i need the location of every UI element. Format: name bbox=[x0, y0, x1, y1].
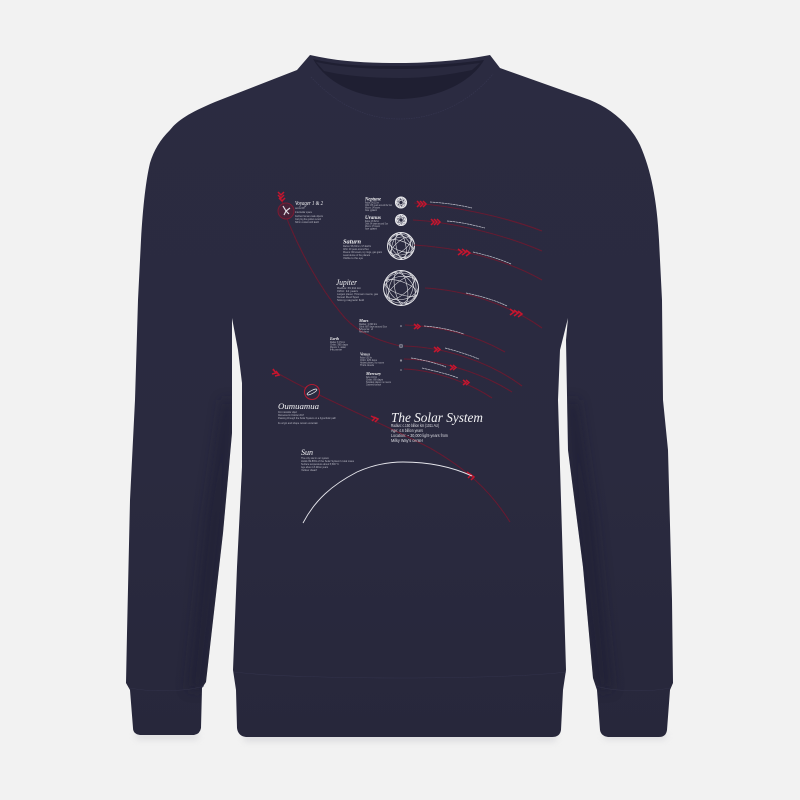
planet: earth: Earth bbox=[329, 336, 339, 341]
planet: jupiter bbox=[336, 267, 421, 309]
planet: mercury: Orbit: 88 days bbox=[366, 378, 383, 382]
orbit: saturn bbox=[414, 245, 542, 280]
planet: saturn: Moons: 82 known, icy rings, gas giant bbox=[343, 250, 382, 254]
planet: saturn: Saturn bbox=[343, 238, 361, 246]
orbit: neptune bbox=[414, 201, 542, 231]
planet: earth: Moons: 1, water bbox=[330, 345, 346, 349]
sweatshirt bbox=[126, 55, 673, 737]
icon: voyager probe bbox=[278, 203, 294, 219]
orbit: mars bbox=[405, 324, 505, 352]
text: sun: Sun bbox=[301, 448, 313, 457]
orbit: venus bbox=[404, 358, 512, 392]
sweatshirt silhouette bbox=[126, 55, 673, 737]
planet: jupiter: Largest planet, 79 known moons, gas bbox=[337, 292, 378, 296]
text: sun: Holds 99.86% of the Solar System's total mass bbox=[301, 459, 354, 463]
planet: uranus bbox=[365, 213, 407, 230]
text: oumuamua: Its origin and shape remain uncertain bbox=[278, 421, 318, 425]
planet: earth: Radius: 6,371 km bbox=[330, 340, 345, 344]
planet: venus: Hottest planet, no moons bbox=[360, 360, 384, 364]
title: The Solar System bbox=[391, 411, 483, 426]
planet: mars: Orbit: 687 days around Sun bbox=[359, 324, 387, 328]
planet: neptune bbox=[364, 196, 407, 212]
sun arc bbox=[303, 462, 472, 523]
back collar band bbox=[316, 62, 480, 78]
planet: neptune: Orbit: 165 years around the Sun bbox=[365, 203, 392, 207]
planet: saturn: Least dense of the planets bbox=[343, 253, 370, 257]
planet: uranus: Radius: 25,362 km bbox=[365, 219, 379, 223]
solar system facts bbox=[391, 423, 448, 443]
text: sun: Age about 4.6 billion years bbox=[301, 465, 328, 469]
planet: saturn: Visible to the eye bbox=[343, 256, 363, 260]
planet: venus bbox=[360, 352, 402, 367]
planet: uranus: Orbit: 84 years around Sun bbox=[365, 222, 388, 226]
hem seam bbox=[234, 672, 566, 678]
orbit: mercury bbox=[404, 368, 492, 398]
planet: saturn: Orbit: 29 years around Sun bbox=[343, 247, 369, 251]
planet: jupiter: Jupiter bbox=[336, 278, 358, 287]
text: sun: Yellow dwarf bbox=[301, 468, 317, 472]
planet: neptune: Ice giant bbox=[365, 208, 377, 212]
planet: mercury: Smallest planet, no moons bbox=[366, 380, 391, 384]
planet: jupiter: Orbit: 12 years bbox=[337, 289, 359, 293]
solar system facts: Location: ~ 30,000 light-years from bbox=[391, 433, 448, 438]
text: voyager: Interstellar space bbox=[295, 210, 312, 214]
planet: neptune: Radius: 24,622 km bbox=[365, 200, 379, 204]
planet: saturn: Radius: 58,232 km, 9.5 Earths bbox=[343, 244, 371, 248]
text: oumuamua bbox=[278, 402, 336, 425]
text: oumuamua: Oumuamua bbox=[278, 402, 319, 411]
planet: jupiter: Great Red Spot bbox=[337, 295, 359, 299]
text: voyager: Carrying the golden record bbox=[295, 217, 321, 221]
text: oumuamua: Discovered in October 2017 bbox=[278, 413, 304, 417]
right cuff seam bbox=[596, 686, 670, 691]
collar seam bbox=[311, 74, 493, 119]
title block bbox=[391, 411, 483, 443]
solar system artwork bbox=[272, 192, 542, 523]
solar system facts: Radius: c.150 billion km (1011 AU) bbox=[391, 423, 439, 428]
planet: neptune: Neptune bbox=[364, 198, 382, 202]
orbit: uranus bbox=[413, 219, 542, 251]
planet: neptune: Moons: 14 known bbox=[365, 206, 380, 210]
planet: venus: Radius: 6,052 km bbox=[360, 356, 372, 360]
text: oumuamua: Passing through the Solar System on a hyperbolic path bbox=[278, 416, 336, 420]
planet: jupiter: Radius: 69,911 km bbox=[337, 286, 361, 290]
text: voyager: Launched 1977 bbox=[295, 206, 305, 210]
left cuff seam bbox=[130, 686, 204, 691]
shadow beneath garment bbox=[136, 733, 666, 741]
planet: earth: Orbit: 365 days bbox=[330, 342, 348, 346]
planet: mars: Red planet bbox=[359, 330, 369, 334]
solar system facts: Age: 4.6 billion years bbox=[391, 428, 424, 433]
planet: venus: Thick clouds bbox=[360, 363, 374, 367]
planet: venus: Venus bbox=[360, 352, 370, 356]
icon: oumuamua bbox=[304, 384, 320, 400]
planet: uranus: Ice giant bbox=[365, 226, 377, 230]
planet: uranus: Uranus bbox=[365, 216, 381, 221]
planet: mercury: Mercury bbox=[365, 371, 382, 376]
orbit: earth bbox=[404, 346, 522, 386]
planet: uranus: Moons: 27 known bbox=[365, 224, 380, 228]
orbit: jupiter bbox=[425, 288, 542, 328]
text: oumuamua: First interstellar object bbox=[278, 410, 297, 414]
planet: mercury: Radius: 2,440 km bbox=[366, 375, 377, 379]
text: voyager: Still in contact with Earth bbox=[295, 220, 319, 224]
text: sun: Surface temperature about 5,500 °C bbox=[301, 462, 340, 466]
neck interior bbox=[313, 59, 484, 99]
text: sun: The only star in our system bbox=[301, 456, 329, 460]
text: sun bbox=[301, 448, 354, 472]
planet: venus: Orbit: 225 days bbox=[360, 358, 377, 362]
voyager trajectory bbox=[278, 192, 400, 346]
planet: mercury: Cratered surface bbox=[366, 382, 381, 386]
planet: earth bbox=[329, 336, 403, 352]
planet: saturn bbox=[343, 230, 417, 262]
planet: mercury bbox=[365, 369, 402, 386]
planet: jupiter: Strong magnetic field bbox=[337, 298, 364, 302]
planet: earth: Home bbox=[330, 348, 342, 352]
text: voyager: Farthest human-made objects bbox=[295, 214, 323, 218]
planet: mars bbox=[358, 318, 402, 334]
planet: mars: Moons: 2 bbox=[359, 327, 373, 331]
oumuamua trajectory bbox=[272, 369, 510, 522]
planet: mars: Mars bbox=[358, 318, 369, 323]
text: voyager bbox=[295, 201, 323, 224]
sleeve shading bbox=[188, 400, 612, 690]
solar system facts: Milky Way's center bbox=[391, 438, 423, 443]
planet: mars: Radius: 3,390 km bbox=[359, 322, 377, 326]
text: voyager: Voyager 1 & 2 bbox=[295, 201, 323, 207]
